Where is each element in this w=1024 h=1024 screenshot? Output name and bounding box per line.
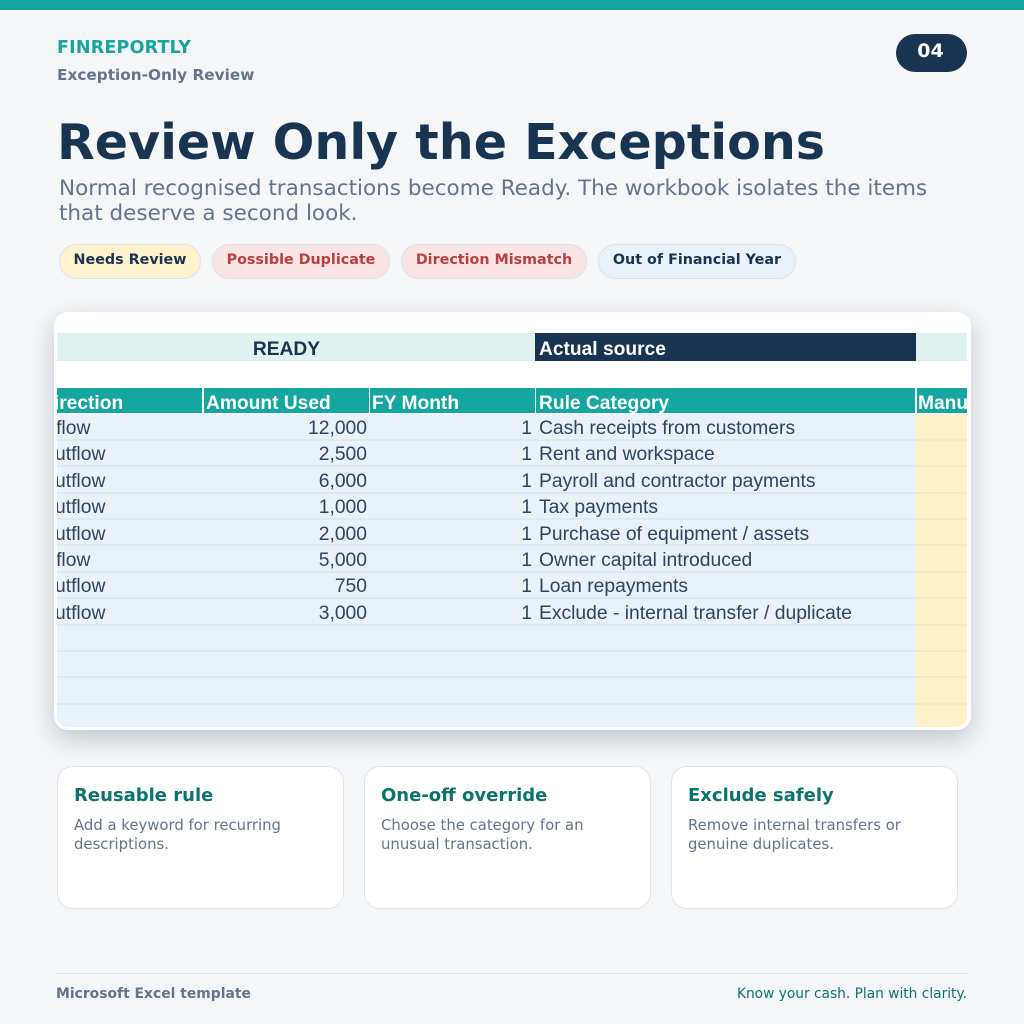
label: ready: READY [253,339,320,360]
label: actual source: Actual source [539,339,666,360]
card heading: Exclude safely [688,785,834,806]
row 3: Payroll and contractor payments [539,471,816,492]
card text: descriptions. [74,835,169,853]
row 5: 1 [521,524,532,545]
band: ready [57,333,967,361]
card text [688,816,901,853]
row 2: 2,500 [319,444,367,465]
row 4: 1,000 [319,497,367,518]
row 3: 1 [521,471,532,492]
manual override column [916,414,967,727]
spreadsheet panel [54,312,971,730]
page number badge: 04 [917,40,944,62]
brand name: FINREPORTLY [57,38,191,58]
row 7: 750 [335,576,367,597]
row 5: 2,000 [319,524,367,545]
card: reusable rule [56,766,344,909]
subtitle: Normal recognised transactions become Ready. The workbook isolates the items [59,176,927,201]
row 4: Tax payments [539,497,658,518]
pill: out of financial year [598,244,796,278]
card text: Add a keyword for recurring [74,816,281,834]
subtitle [59,176,927,226]
card text: Choose the category for an [381,816,584,834]
card text: Remove internal transfers or [688,816,901,834]
pill: needs review: Needs Review [74,252,186,268]
row 5 [57,524,809,545]
row 1 [57,418,795,439]
pill: direction mismatch: Direction Mismatch [416,252,572,268]
table body [57,414,967,727]
row 3 [57,471,816,492]
pill: direction mismatch [401,244,587,278]
header: rule category [536,388,915,413]
card text: unusual transaction. [381,835,533,853]
pill: possible duplicate [212,244,390,278]
top accent bar [0,0,1024,10]
title: Review Only the Exceptions [57,113,825,171]
row 2 [57,444,715,465]
card heading: Reusable rule [74,785,213,806]
header: direction [57,388,202,413]
header: amount used [204,388,369,413]
row 7: Loan repayments [539,576,688,597]
subtitle: that deserve a second look. [59,201,358,226]
label: actual source [535,333,916,361]
row 6: 1 [521,550,532,571]
footer left: Microsoft Excel template [56,986,251,1002]
row 8: 1 [521,603,532,624]
table header [57,388,967,413]
row 5: Purchase of equipment / assets [539,524,809,545]
row 8: 3,000 [319,603,367,624]
row 4 [57,497,658,518]
card heading: One-off override [381,785,547,806]
row 1: 12,000 [308,418,367,439]
section label: Exception-Only Review [57,66,254,84]
status pills [59,244,796,279]
page number badge [896,34,967,72]
row 2: 1 [521,444,532,465]
row 7: 1 [521,576,532,597]
card text: genuine duplicates. [688,835,834,853]
row 1: 1 [521,418,532,439]
pill: possible duplicate: Possible Duplicate [227,252,375,268]
row 6 [57,550,752,571]
spreadsheet screenshot [57,333,967,727]
row 6: 5,000 [319,550,367,571]
card text [74,816,281,853]
row 7 [57,576,688,597]
row 1: Cash receipts from customers [539,418,795,439]
card: exclude safely [670,766,958,909]
pill: needs review [59,244,201,278]
pill: out of financial year: Out of Financial Year [613,252,781,268]
footer right: Know your cash. Plan with clarity. [737,986,967,1002]
row 2: Rent and workspace [539,444,715,465]
header: fy month [370,388,535,413]
card text [381,816,584,853]
row 3: 6,000 [319,471,367,492]
card: one-off override [364,766,650,909]
row 8: Exclude - internal transfer / duplicate [539,603,852,624]
row 8 [57,603,852,624]
row 4: 1 [521,497,532,518]
row 6: Owner capital introduced [539,550,752,571]
